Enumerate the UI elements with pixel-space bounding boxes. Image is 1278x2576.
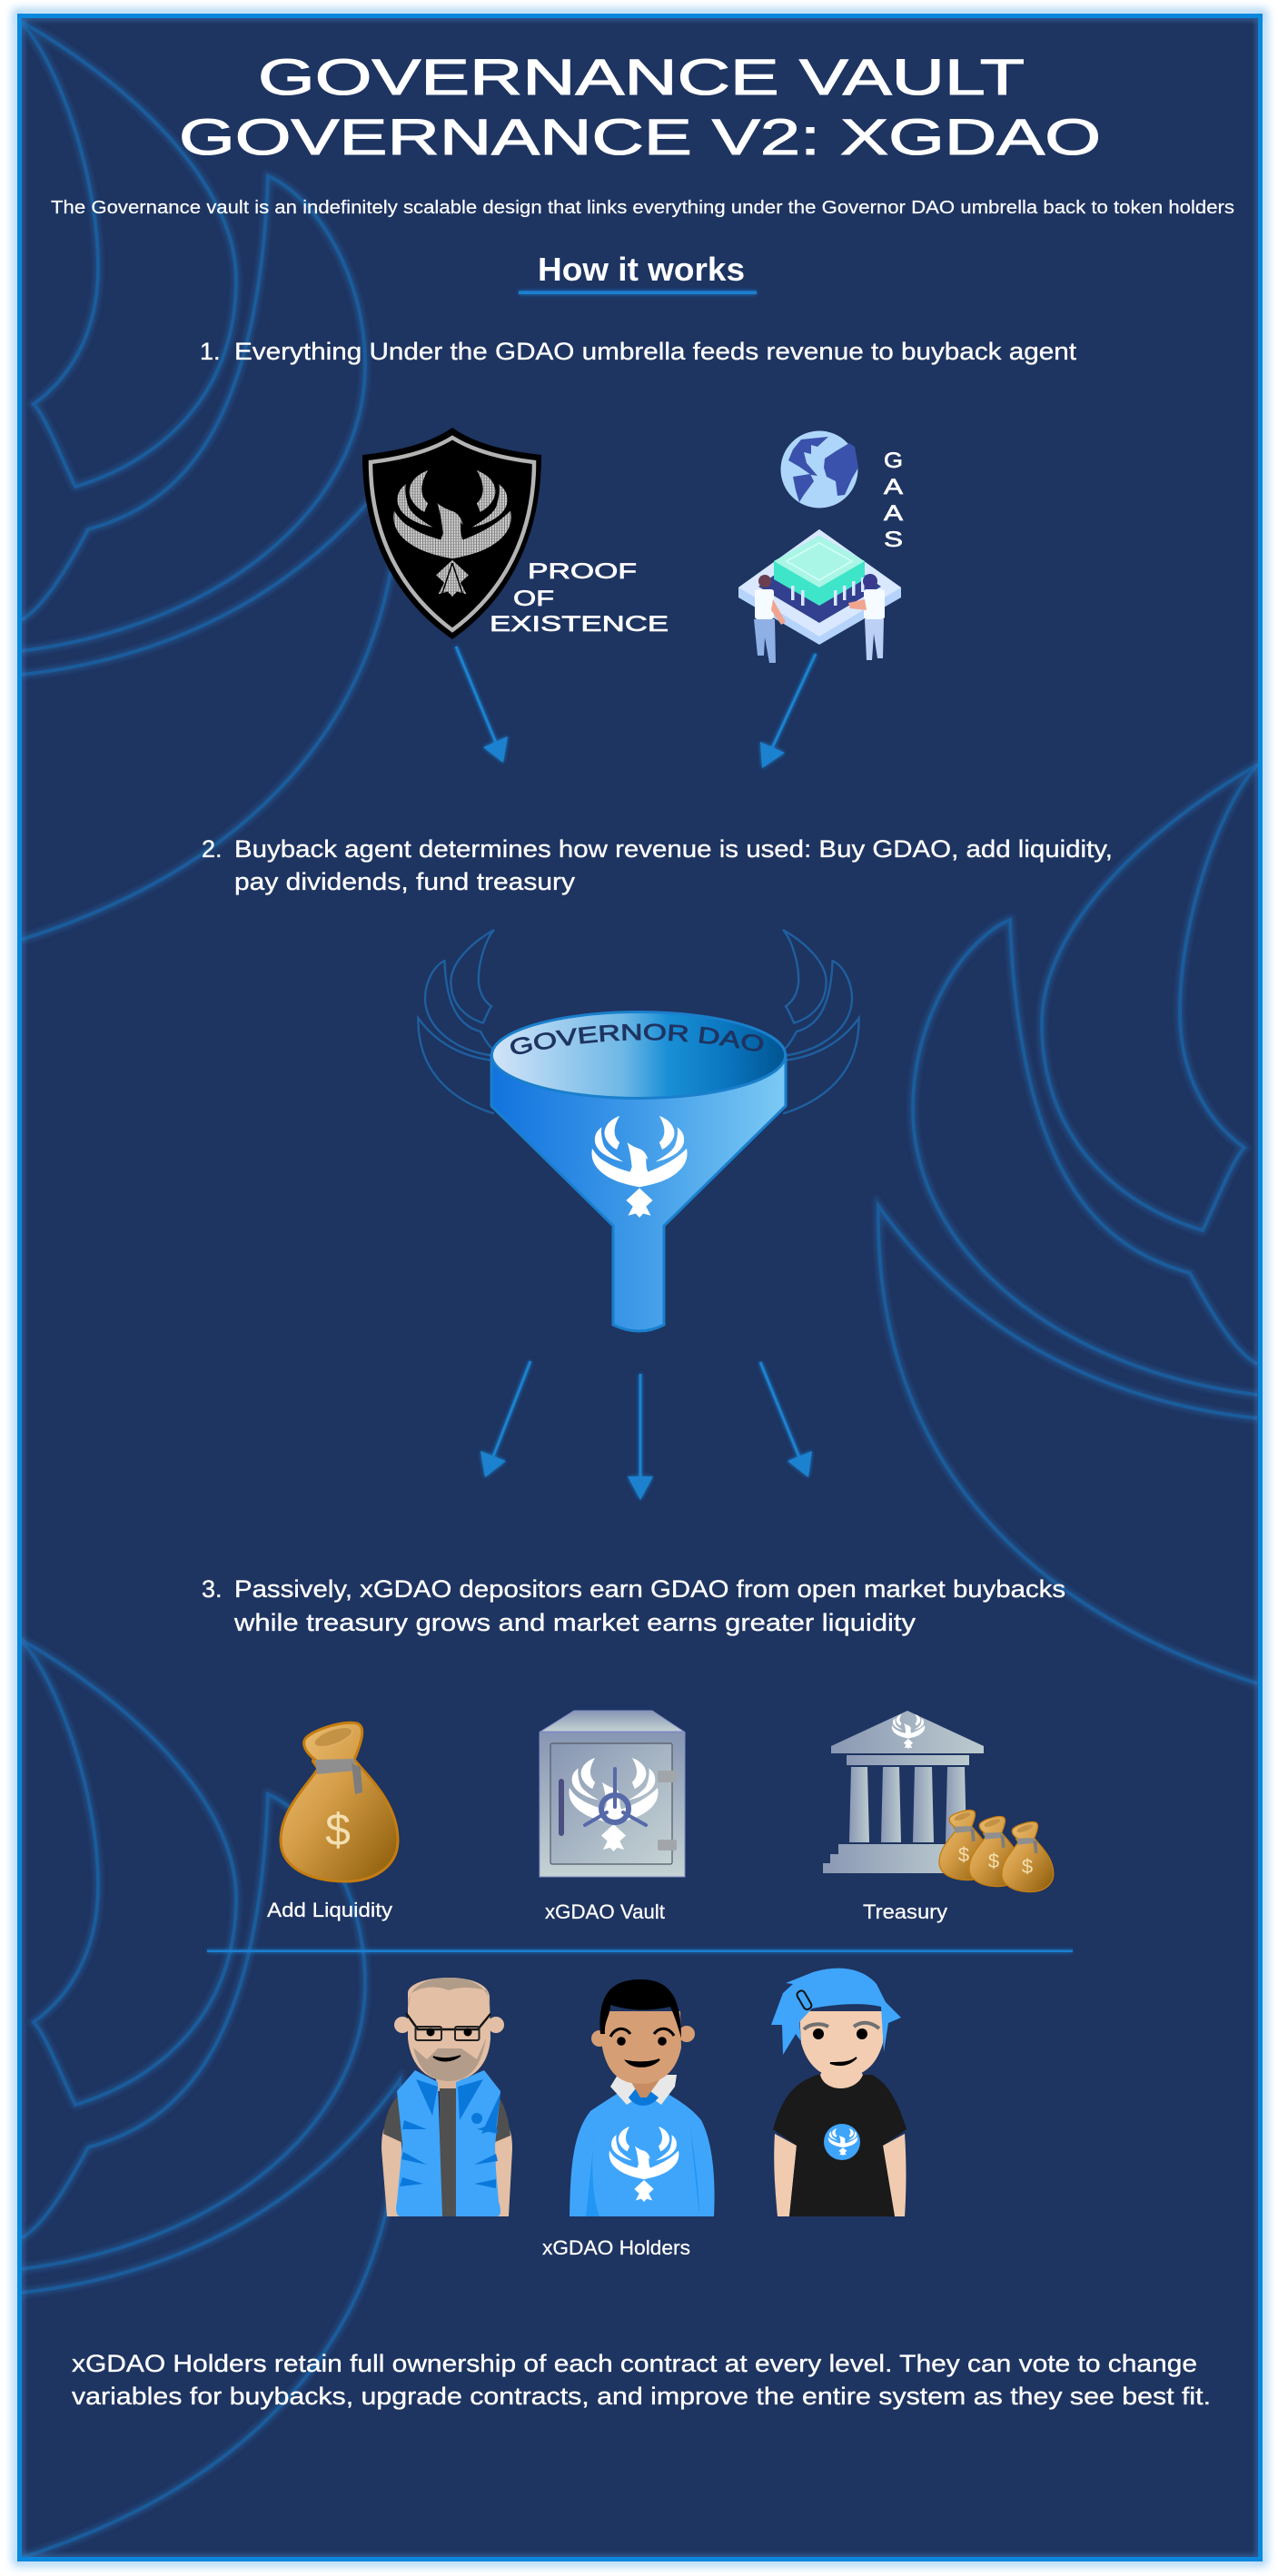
label: treasury: Treasury	[863, 1900, 947, 1923]
title: GOVERNANCE VAULT	[258, 48, 1025, 105]
icon: small money bags: $	[958, 1843, 969, 1866]
step 1 text: 1.	[200, 338, 221, 365]
label: add liquidity: Add Liquidity	[267, 1899, 392, 1921]
avatar: bald man in vest	[381, 1978, 512, 2216]
icon: small money bags: $	[988, 1850, 999, 1872]
heading: how it works: How it works	[538, 251, 745, 288]
arrow: funnel left	[480, 1361, 530, 1477]
arrow: GAAS to funnel	[760, 654, 816, 768]
icon: funnel	[490, 1011, 787, 1333]
avatar: blue-haired person	[771, 1969, 906, 2216]
subtitle: The Governance vault is an indefinitely scalable design that links everything under the Governor DAO umbrella back to token holders	[51, 198, 1234, 218]
icon: small money bags: $	[1022, 1855, 1033, 1878]
label: GAAS	[884, 449, 903, 552]
title	[179, 48, 1101, 165]
title: GOVERNANCE V2: XGDAO	[179, 108, 1101, 165]
label: GAAS: A	[884, 501, 903, 526]
label: GAAS: A	[884, 475, 903, 499]
icon: money bag	[281, 1722, 398, 1881]
step 2 text: Buyback agent determines how revenue is used: Buy GDAO, add liquidity,	[234, 835, 1113, 863]
closing text	[72, 2350, 1211, 2410]
step 3 text	[202, 1575, 1065, 1636]
icon: chip platform with people	[738, 529, 901, 663]
icon: treasury building	[823, 1711, 984, 1873]
avatar: man in blue sweater	[570, 1979, 715, 2216]
label: xGDAO vault: xGDAO Vault	[545, 1900, 665, 1923]
step 2 text: 2.	[202, 835, 223, 863]
divider	[207, 1950, 1073, 1952]
person left	[754, 575, 786, 663]
label: GAAS: G	[884, 449, 903, 473]
step 3 text: 3.	[202, 1575, 223, 1603]
icon: proof of existence shield	[362, 428, 541, 639]
step 3 text: Passively, xGDAO depositors earn GDAO from open market buybacks	[234, 1575, 1065, 1603]
label: proof of existence: EXISTENCE	[490, 612, 669, 637]
label: xGDAO holders: xGDAO Holders	[542, 2236, 690, 2259]
person right	[848, 574, 885, 660]
step 3 text: while treasury grows and market earns greater liquidity	[233, 1609, 916, 1636]
decorative funnel wings	[418, 930, 859, 1113]
arrow: funnel right	[760, 1362, 812, 1477]
label: GAAS: S	[884, 528, 903, 552]
icon: small money bags	[939, 1811, 1054, 1892]
step 2 text: pay dividends, fund treasury	[234, 868, 576, 895]
label: proof of existence: PROOF	[528, 559, 637, 584]
step 2 text	[202, 835, 1113, 895]
icon: vault	[540, 1711, 685, 1877]
icon: money bag: $	[325, 1804, 351, 1855]
label: proof of existence	[490, 559, 669, 637]
head	[394, 1978, 504, 2081]
arrow: funnel centre	[628, 1374, 653, 1500]
icon: globe	[781, 430, 858, 508]
closing text: variables for buybacks, upgrade contracts, and improve the entire system as they see best fit.	[72, 2383, 1211, 2410]
closing text: xGDAO Holders retain full ownership of each contract at every level. They can vote to change	[72, 2350, 1197, 2377]
step 1 text: Everything Under the GDAO umbrella feeds revenue to buyback agent	[234, 338, 1077, 365]
arrow: shield to funnel	[456, 646, 508, 763]
label: proof of existence: OF	[513, 587, 554, 611]
funnel lettering: GOVERNOR DAO	[510, 1023, 763, 1055]
funnel phoenix logo	[591, 1116, 688, 1218]
